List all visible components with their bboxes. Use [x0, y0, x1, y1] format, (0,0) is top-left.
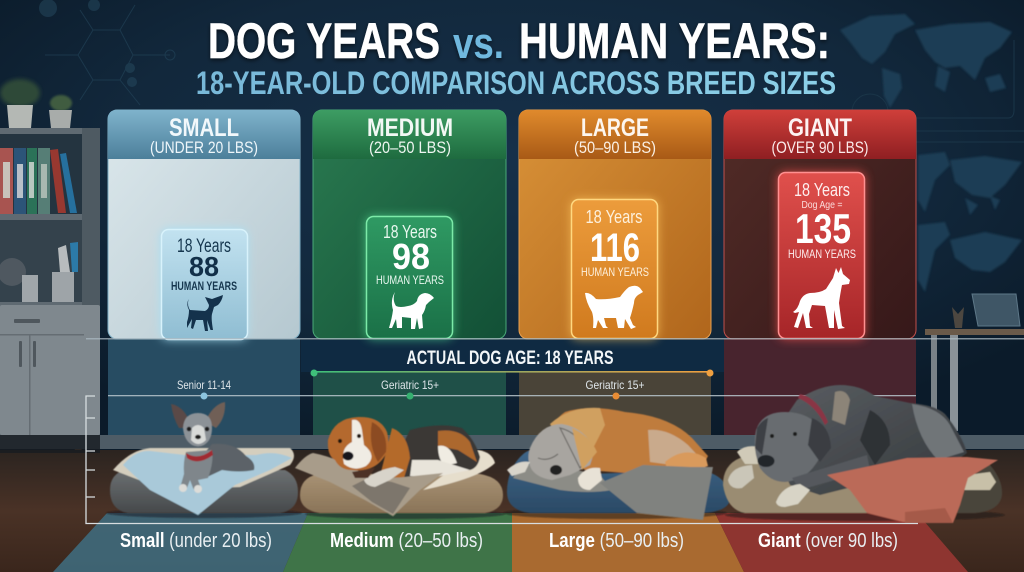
- icon: golden retriever silhouette: [585, 286, 643, 329]
- panel header: small: [108, 110, 300, 159]
- label: giant: Giant (over 90 lbs): [758, 530, 898, 552]
- stat card: giant: 135: [795, 205, 851, 252]
- age range bar: [310, 370, 714, 376]
- stat card: medium: 18 Years: [383, 222, 437, 242]
- dog and bed: medium: [295, 417, 505, 519]
- plants on shelf: [0, 79, 72, 128]
- label: large: Large (50–90 lbs): [549, 530, 684, 552]
- panel header: giant: [724, 110, 916, 159]
- label: small: Small (under 20 lbs): [120, 530, 272, 552]
- stat card: medium: HUMAN YEARS: [376, 273, 444, 287]
- stat card: large: HUMAN YEARS: [581, 265, 649, 279]
- icon: great dane silhouette: [793, 267, 850, 329]
- panel: giant: [724, 110, 916, 339]
- panel header: small: SMALL: [169, 114, 239, 142]
- panel header: large: LARGE: [581, 114, 649, 142]
- stat card: small: 18 Years: [177, 236, 231, 257]
- life stage line: [108, 392, 916, 400]
- divider line beneath panels: [86, 338, 1024, 340]
- icon: beagle silhouette: [389, 292, 434, 329]
- icon: chihuahua silhouette: [187, 295, 223, 331]
- stat card: giant: [778, 172, 865, 339]
- title: DOG YEARS: [208, 13, 440, 69]
- title: vs.: [453, 19, 504, 68]
- stat card: medium: [366, 216, 453, 339]
- life stage labels: Geriatric 15+: [381, 378, 439, 392]
- timeline heading: ACTUAL DOG AGE: 18 YEARS: [406, 348, 614, 369]
- panel header: medium: MEDIUM: [367, 114, 453, 142]
- dog and bed: large: [503, 408, 730, 520]
- subtitle: 18-YEAR-OLD COMPARISON ACROSS BREED SIZES: [196, 65, 836, 101]
- translucent column strips: [108, 339, 916, 435]
- stat card: giant: 18 Years: [794, 180, 850, 200]
- dog and bed: small: [106, 402, 302, 518]
- stat card: small: HUMAN YEARS: [171, 279, 237, 293]
- binders: [0, 148, 77, 214]
- panel header: small: (UNDER 20 LBS): [150, 138, 258, 157]
- stat card: small: [161, 229, 248, 340]
- title: HUMAN YEARS:: [519, 13, 830, 69]
- world map: upper right: [840, 14, 1012, 108]
- bookshelf and cabinet: [0, 79, 100, 453]
- dashboard outline: upper right: [850, 40, 1024, 142]
- stat card: giant: Dog Age =: [802, 200, 843, 211]
- title: [208, 13, 830, 69]
- floor: [0, 450, 1024, 572]
- shelf ornaments: [0, 242, 78, 302]
- background wall: [0, 0, 1024, 450]
- stat card: small: 88: [189, 251, 219, 282]
- dog and bed: giant: [723, 385, 1005, 523]
- life stage labels: Senior 11-14: [177, 378, 231, 392]
- stat card: large: 116: [590, 226, 640, 270]
- stat card: large: 18 Years: [586, 207, 642, 227]
- stat card: large: [571, 199, 658, 339]
- desk with laptop: [925, 294, 1024, 431]
- stat card: medium: 98: [392, 236, 430, 277]
- life stage labels: [177, 378, 644, 392]
- life stage labels: Geriatric 15+: [586, 378, 644, 392]
- panel: small: [108, 110, 300, 340]
- label: medium: Medium (20–50 lbs): [330, 530, 483, 552]
- panel header: large: [519, 110, 711, 159]
- panel header: medium: [313, 110, 506, 159]
- stat card: giant: HUMAN YEARS: [788, 247, 856, 261]
- panel: medium: [313, 110, 506, 339]
- colored floor strips: [53, 513, 968, 572]
- panel header: giant: (OVER 90 LBS): [772, 138, 868, 157]
- panel header: medium: (20–50 LBS): [369, 138, 451, 157]
- chart bracket: [86, 396, 918, 524]
- category labels: [120, 530, 898, 552]
- panel: large: [519, 110, 711, 339]
- panel header: large: (50–90 LBS): [574, 138, 656, 157]
- panel header: giant: GIANT: [788, 114, 852, 142]
- skirting board: [0, 435, 1024, 449]
- decorative molecule network: [39, 0, 175, 105]
- world map: lower right: [918, 152, 1022, 292]
- cabinet: [0, 305, 100, 435]
